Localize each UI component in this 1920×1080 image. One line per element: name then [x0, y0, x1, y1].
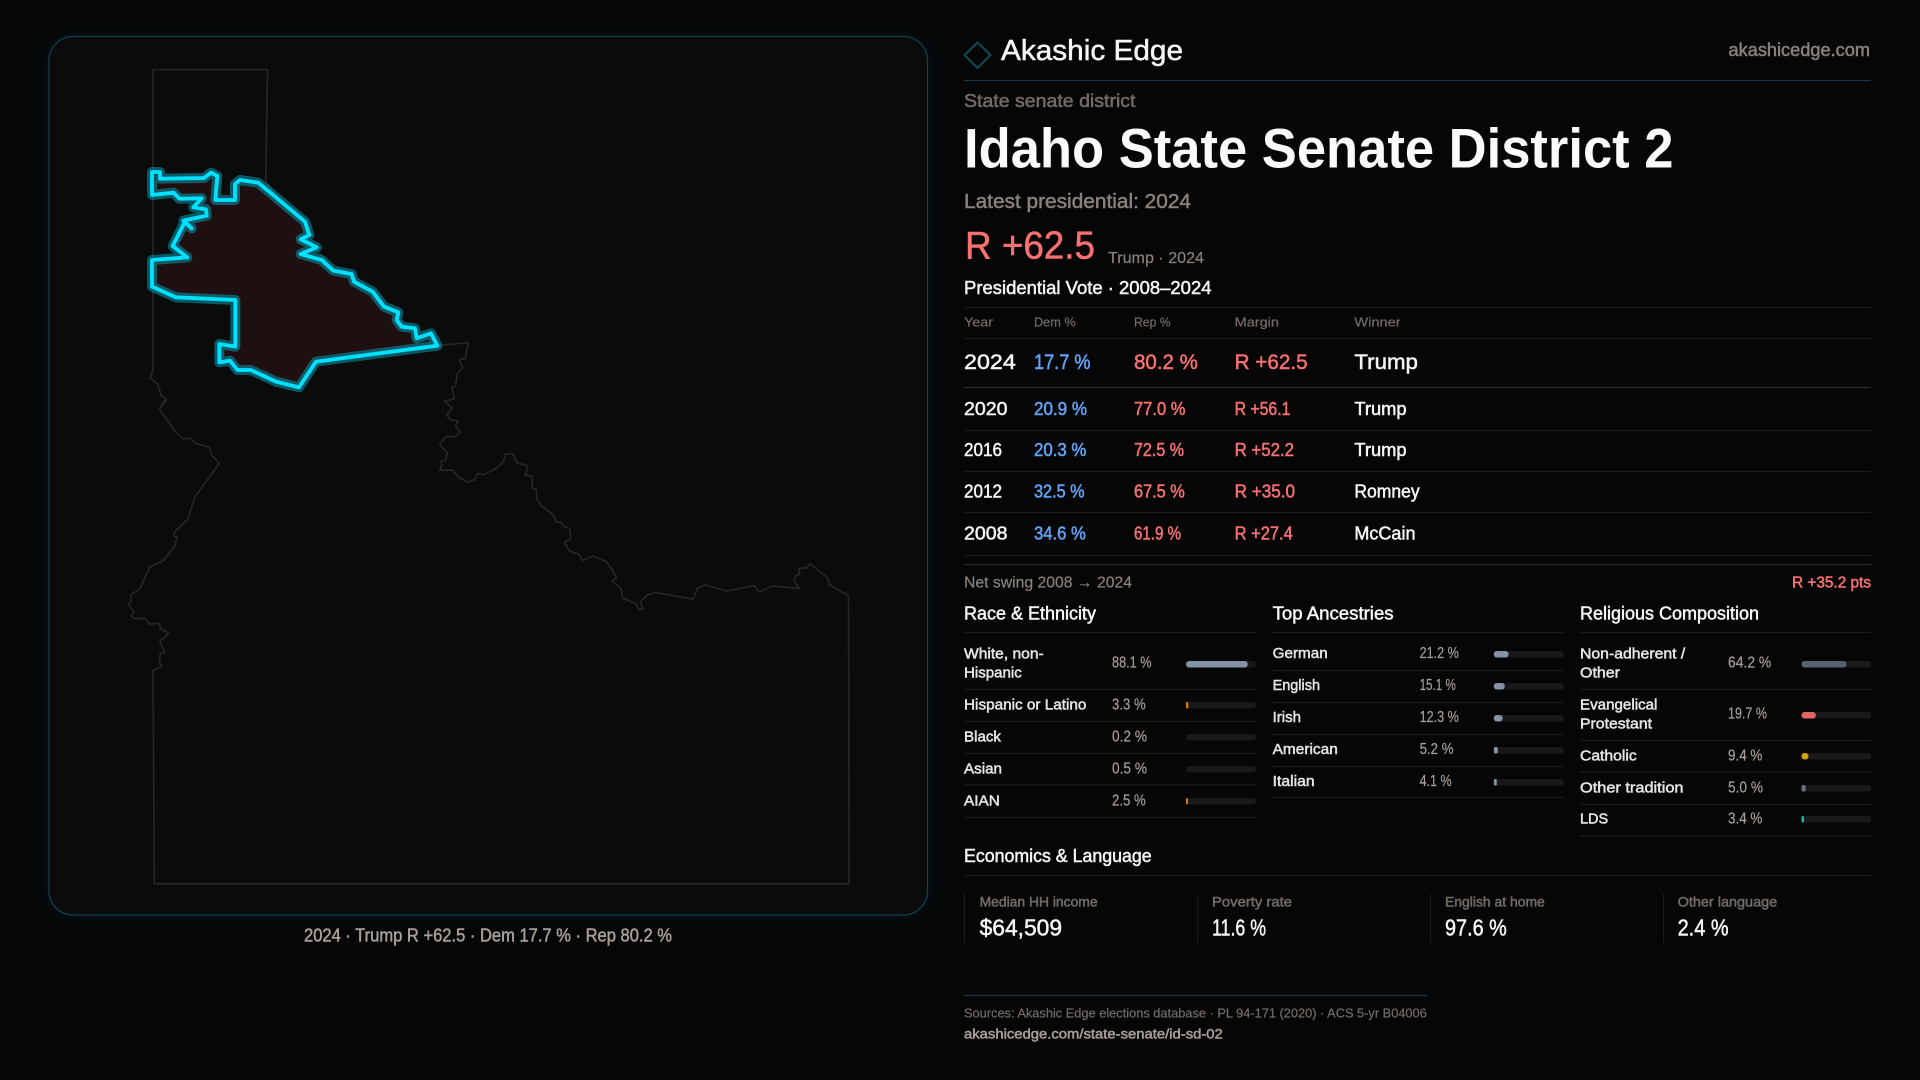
row: black [964, 728, 1256, 745]
row: lds: 3.4 % [1728, 810, 1763, 827]
row: other tradition: 5.0 % [1728, 779, 1763, 796]
stat: other language: Other language [1678, 893, 1777, 909]
row 2012 [964, 481, 1420, 501]
row: evangelical [1580, 696, 1872, 732]
row 2008: 61.9 % [1134, 523, 1181, 543]
row: american: American [1273, 741, 1338, 758]
stat: other language [1664, 893, 1777, 943]
stat: poverty rate [1198, 893, 1292, 943]
row: non-adherent [1580, 645, 1872, 681]
row: other tradition [1580, 779, 1872, 796]
headline winner note: Trump · 2024 [1108, 250, 1204, 267]
stat: english at home: 97.6 % [1445, 915, 1507, 941]
icon: logo diamond [964, 42, 990, 68]
row: lds [1580, 810, 1872, 827]
sources note: Sources: Akashic Edge elections database · PL 94-171 (2020) · ACS 5-yr B04006 [964, 1007, 1427, 1021]
row 2012: 2012 [964, 481, 1002, 501]
heading: religion: Religious Composition [1580, 603, 1759, 623]
row: italian [1273, 773, 1564, 790]
row 2024: R +62.5 [1235, 350, 1308, 374]
panel: religious composition [1580, 603, 1872, 836]
row 2012: 32.5 % [1034, 481, 1085, 501]
row: irish [1273, 709, 1564, 726]
stat: median income [964, 893, 1098, 943]
row 2024: 2024 [964, 350, 1016, 374]
stat: english at home: English at home [1445, 893, 1545, 909]
row: asian: 0.5 % [1112, 760, 1147, 777]
row: german: 21.2 % [1420, 645, 1459, 662]
subtitle: Latest presidential: 2024 [964, 191, 1191, 213]
panel: race and ethnicity [964, 603, 1256, 818]
row: hispanic: Hispanic or Latino [964, 696, 1086, 713]
row 2016: Trump [1354, 440, 1407, 460]
stat: poverty rate: 11.6 % [1212, 915, 1266, 941]
row: hispanic: 3.3 % [1112, 696, 1146, 713]
row: non-adherent: 64.2 % [1728, 654, 1771, 671]
row 2008: R +27.4 [1235, 523, 1293, 543]
row 2016: R +52.2 [1235, 440, 1294, 460]
row: asian [964, 760, 1256, 777]
eyebrow: State senate district [964, 91, 1136, 111]
table header row: Rep % [1134, 314, 1171, 330]
row: catholic [1580, 747, 1872, 764]
row: black: 0.2 % [1112, 728, 1147, 745]
row 2024: 17.7 % [1034, 350, 1090, 374]
row 2020: 77.0 % [1134, 399, 1185, 419]
row: irish: 12.3 % [1420, 709, 1459, 726]
row: german [1273, 645, 1564, 662]
stat: other language: 2.4 % [1678, 915, 1729, 941]
row: catholic: 9.4 % [1728, 747, 1763, 764]
table header row: Year [964, 314, 994, 330]
table header row: Margin [1235, 314, 1279, 330]
row: white: 88.1 % [1112, 654, 1152, 671]
page url: akashicedge.com/state-senate/id-sd-02 [964, 1026, 1223, 1041]
table header row: Winner [1354, 314, 1401, 330]
site url: akashicedge.com [1728, 40, 1870, 60]
title: Idaho State Senate District 2 [964, 116, 1674, 180]
heading: ancestries: Top Ancestries [1273, 603, 1394, 623]
row: english: 15.1 % [1420, 677, 1456, 694]
row 2020: 20.9 % [1034, 399, 1087, 419]
stat: median income: Median HH income [980, 893, 1098, 909]
row 2008: 34.6 % [1034, 523, 1086, 543]
net swing label: Net swing 2008 → 2024 [964, 574, 1132, 591]
row: evangelical: Protestant [1580, 715, 1653, 732]
row: white: White, non- [964, 645, 1044, 662]
row 2016 [964, 440, 1407, 460]
row 2020: 2020 [964, 399, 1008, 419]
row: hispanic [964, 696, 1256, 713]
row 2016: 20.3 % [1034, 440, 1086, 460]
panel: top ancestries [1273, 603, 1564, 798]
row: black: Black [964, 728, 1001, 745]
row: english [1273, 677, 1564, 694]
row 2016: 72.5 % [1134, 440, 1184, 460]
row 2008: 2008 [964, 523, 1008, 543]
stat: poverty rate: Poverty rate [1212, 893, 1292, 909]
row: irish: Irish [1273, 709, 1301, 726]
row: white: Hispanic [964, 664, 1022, 681]
map caption: 2024 · Trump R +62.5 · Dem 17.7 % · Rep 80.2 % [304, 926, 672, 946]
row 2016: 2016 [964, 440, 1002, 460]
row: aian [964, 792, 1256, 809]
row: non-adherent: Non-adherent / [1580, 645, 1686, 662]
heading: economics: Economics & Language [964, 846, 1152, 866]
row 2008: McCain [1354, 523, 1416, 543]
row 2012: R +35.0 [1235, 481, 1295, 501]
row: catholic: Catholic [1580, 747, 1637, 764]
row 2008 [964, 523, 1416, 543]
stat: median income: $64,509 [980, 915, 1062, 941]
row: aian: AIAN [964, 792, 1000, 809]
row 2024: 80.2 % [1134, 350, 1198, 374]
row: aian: 2.5 % [1112, 792, 1146, 809]
row 2024 [964, 350, 1418, 374]
headline margin: R +62.5 [965, 224, 1095, 268]
row: asian: Asian [964, 760, 1002, 777]
row: evangelical: Evangelical [1580, 696, 1657, 713]
brand name: Akashic Edge [1001, 35, 1183, 67]
panel: economics and language [964, 846, 1871, 943]
district shape: Senate District 2 [152, 172, 437, 387]
row 2012: 67.5 % [1134, 481, 1185, 501]
row: german: German [1273, 645, 1328, 662]
row 2012: Romney [1354, 481, 1420, 501]
panel: map [49, 36, 928, 915]
row 2024: Trump [1354, 350, 1418, 374]
table header row [964, 314, 1401, 330]
row: american: 5.2 % [1420, 741, 1454, 758]
row: evangelical: 19.7 % [1728, 705, 1767, 722]
panel: presidential vote table [964, 278, 1871, 556]
row: american [1273, 741, 1564, 758]
heading: race: Race & Ethnicity [964, 603, 1096, 623]
row: non-adherent: Other [1580, 664, 1620, 681]
table heading: Presidential Vote · 2008–2024 [964, 278, 1212, 298]
row: other tradition: Other tradition [1580, 779, 1684, 796]
row: italian: Italian [1273, 773, 1315, 790]
row 2020: R +56.1 [1235, 399, 1290, 419]
net swing value: R +35.2 pts [1792, 574, 1871, 591]
stat: english at home [1430, 893, 1545, 943]
row 2020: Trump [1354, 399, 1407, 419]
row: italian: 4.1 % [1420, 773, 1452, 790]
row: english: English [1273, 677, 1320, 694]
row: lds: LDS [1580, 810, 1608, 827]
state outline: Idaho [129, 70, 849, 884]
row 2020 [964, 399, 1407, 419]
row: white [964, 645, 1256, 681]
table header row: Dem % [1034, 314, 1076, 330]
